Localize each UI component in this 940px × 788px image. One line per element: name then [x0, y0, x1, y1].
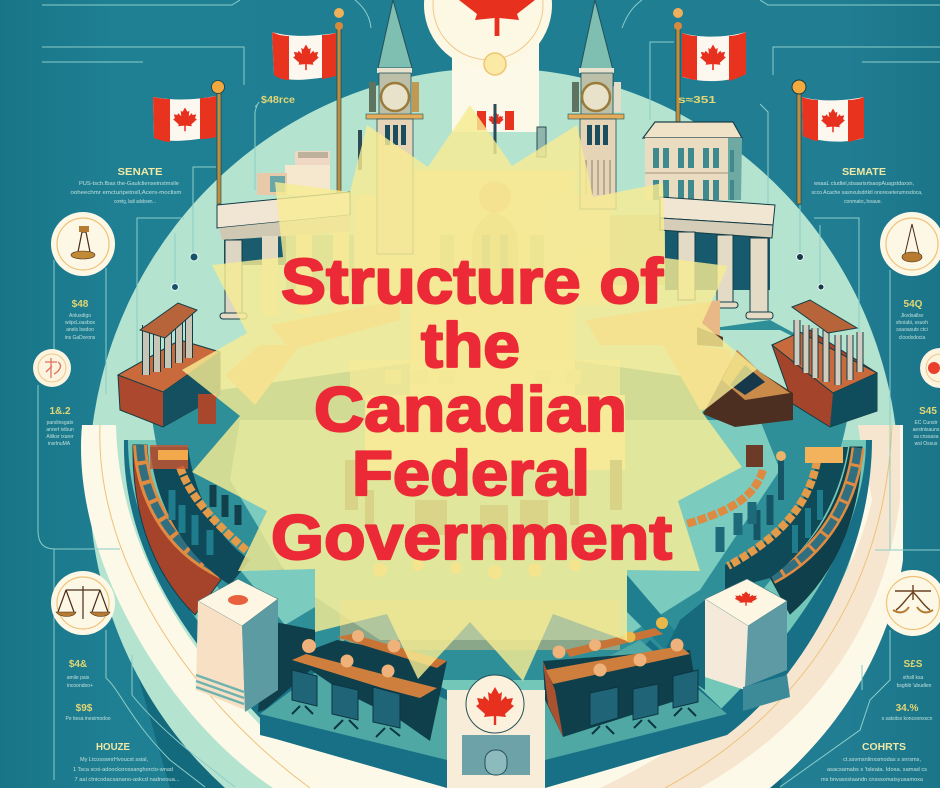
- left stat blocks: Pe tiesa inesimodoo: [65, 716, 111, 722]
- left stat blocks: $48: [72, 299, 89, 310]
- connector lines left: [38, 0, 371, 787]
- ring gold line: [100, 425, 892, 788]
- left house text: HOUZE: [96, 742, 130, 753]
- left stat blocks: $9$: [76, 703, 93, 714]
- left stage with desk and people: [260, 630, 447, 781]
- flag: right upper: [673, 8, 746, 124]
- flag: left lower: [153, 80, 224, 204]
- left stat blocks: parslinsgalo: [47, 420, 74, 426]
- centre pedestal with maple leaf: [447, 675, 545, 788]
- left pedestal: [196, 579, 315, 712]
- left senate text: PUS-tsch.fbas the-Gaulclienseinstmsile: [79, 181, 179, 187]
- right stat blocks: S£S: [904, 659, 923, 670]
- right stat blocks: 54Q: [904, 299, 923, 310]
- starburst background for title: [182, 105, 757, 681]
- right senate text: wsaaL ctudtel,stsaarisrtsaopAuagstdaxsn,: [814, 181, 914, 187]
- icon: left upper circle: [51, 212, 115, 276]
- right stat blocks: aestnisauns: [913, 427, 940, 433]
- title: Canadian: [314, 375, 627, 445]
- right courts text: ct.ssvmsnlinxsmodas s snrsms,: [843, 757, 921, 763]
- left stat blocks: [46, 299, 111, 722]
- right courts text: [821, 742, 928, 783]
- right stat blocks: bsghib 'ubudlen: [897, 683, 932, 689]
- icon: left scales circle: [51, 571, 115, 635]
- right courts text: asacsamabs s 'tsleata. Idosa. samad cs: [827, 767, 928, 773]
- left stat blocks: Anlusdigo: [69, 313, 91, 319]
- seating rows top: [198, 300, 793, 427]
- chairs: [292, 670, 400, 728]
- left desks: [133, 445, 250, 615]
- title: Government: [271, 503, 672, 573]
- right courts text: COHRTS: [862, 742, 906, 753]
- right courts text: ms bnvasxstaandn cnsssomatsyusamoxa: [821, 777, 923, 783]
- right senate text: conmato,.hoaue.: [844, 199, 882, 205]
- left stat blocks: Aliiksr ixarer: [46, 434, 74, 440]
- right senate text: [812, 167, 922, 205]
- left podium: [118, 303, 220, 427]
- left stat blocks: insrlnuMA: [48, 441, 71, 447]
- connector lines right: [622, 0, 940, 787]
- icon: gold coin: [484, 53, 506, 75]
- title: the: [421, 311, 520, 381]
- left clock tower: [358, 0, 430, 300]
- building: central facade: [350, 127, 625, 470]
- dark lower corner bands: [132, 650, 808, 788]
- right stage with desk and people: [543, 617, 727, 774]
- flag: right lower: [792, 80, 864, 204]
- left stat blocks: amile pais: [67, 675, 90, 681]
- right stat blocks: ssaoasuts ctci: [896, 327, 928, 333]
- top centre cream column: [452, 0, 539, 132]
- title: Structure of: [281, 247, 664, 317]
- cream outer ring: [81, 425, 903, 788]
- left senate text: ooheechmr emcturipetnsll,Acers-moclism: [70, 190, 182, 196]
- right portico: [610, 197, 880, 380]
- lower hall people: [340, 460, 622, 650]
- inner floor: [124, 350, 872, 788]
- right stat blocks: EC Cunstr: [914, 420, 938, 426]
- left stat blocks: anrert ivibun: [46, 427, 74, 433]
- right desks: [686, 445, 862, 614]
- right stat blocks: [882, 299, 940, 722]
- right stat blocks: shoiabi, ssuoh: [896, 320, 928, 326]
- mint circle: [89, 68, 899, 788]
- left senate text: [70, 167, 182, 205]
- icon: right upper circle: [880, 212, 940, 276]
- left background block: [257, 151, 330, 196]
- flag: left upper: [272, 8, 344, 193]
- left house text: [73, 742, 180, 783]
- right stat blocks: s satsitss koncexnxscn: [882, 716, 933, 722]
- right building: [643, 122, 742, 200]
- right stat blocks: 34.%: [896, 703, 919, 714]
- right stat blocks: S45: [919, 406, 937, 417]
- icon: right small circle: [920, 348, 940, 388]
- right stat blocks: sthsll ksa: [903, 675, 923, 681]
- left stat blocks: $4&: [69, 659, 87, 670]
- right stat blocks: sa cnssasa: [913, 434, 939, 440]
- top callout numbers: s≈351: [678, 95, 717, 106]
- icon: left small circle: [33, 349, 71, 387]
- left stat blocks: wiipcLoasbos: [65, 320, 96, 326]
- left stat blocks: incoondoo+: [67, 683, 93, 689]
- right stat blocks: Jkvdsallsv: [901, 313, 924, 319]
- right podium: [772, 300, 877, 427]
- left house text: 1 Tsca scoi-adoocksrossanghorcto-wnad: [73, 767, 173, 773]
- left senate text: SENATE: [118, 167, 163, 178]
- top emblem: [424, 0, 552, 75]
- left stat blocks: ins GaDorons: [65, 335, 96, 341]
- right stat blocks: wsl Ossus: [915, 441, 938, 447]
- top callout numbers: $48rce: [261, 95, 295, 106]
- top callout numbers: [261, 95, 717, 106]
- right senate text: scco Acache sasnxulsdrtktl onoreseterumrsdoca,: [812, 190, 922, 196]
- cream right tint: [600, 425, 900, 788]
- right stat blocks: cloodsdocia: [899, 335, 925, 341]
- right senate text: SEMATE: [842, 167, 886, 178]
- icon: right scales circle: [880, 570, 940, 636]
- title: [271, 247, 672, 573]
- chairs: [590, 670, 698, 726]
- right clock tower: [568, 0, 632, 300]
- left house text: 7 aal ctnicodacsanano-askcd nadneoua...: [74, 777, 180, 783]
- left stat blocks: anels lssdoo: [66, 327, 94, 333]
- left house text: My LtcosswnrHvoucst ssial,: [80, 757, 148, 763]
- left senate text: comtg, ladi adsbsen...: [114, 199, 156, 205]
- small central flag: [477, 104, 514, 154]
- title: Federal: [352, 439, 590, 509]
- right pedestal: [660, 579, 790, 711]
- left stat blocks: 1&.2: [49, 406, 71, 417]
- left portico: [217, 192, 354, 319]
